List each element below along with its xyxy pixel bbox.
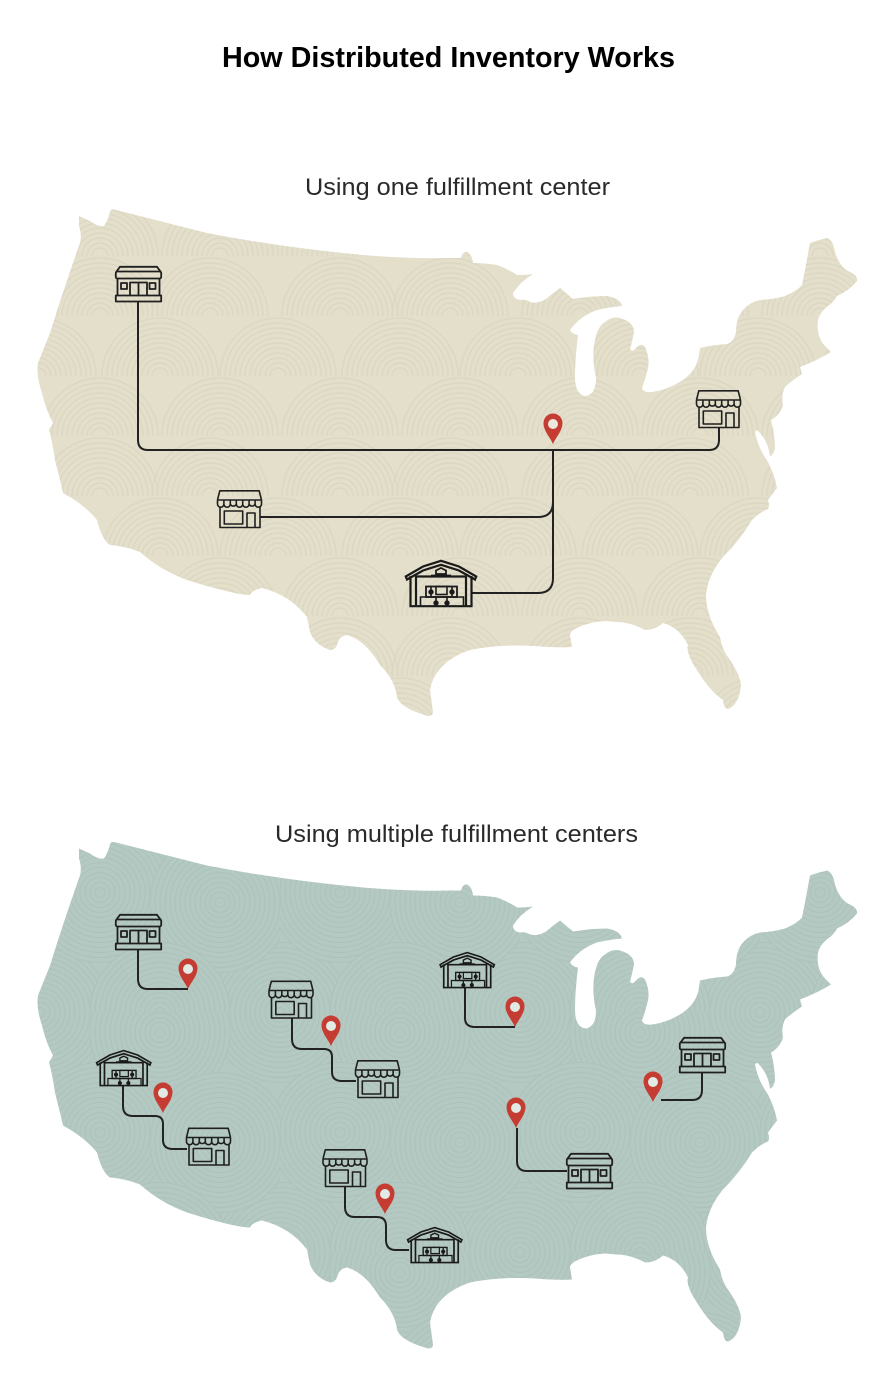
icon: store 1	[116, 915, 161, 950]
icon: location pin 1	[178, 958, 198, 989]
icon: warehouse 2	[97, 1051, 151, 1086]
icon: store 3	[567, 1154, 612, 1188]
icon: warehouse 1	[440, 953, 494, 988]
icon: location pin 3	[506, 996, 524, 1027]
panel: multiple fulfillment centers map	[38, 842, 857, 1348]
icon: location pin 6	[506, 1098, 526, 1128]
title: How Distributed Inventory Works	[222, 42, 675, 74]
heading: multiple fulfillment centers: Using multiple fulfillment centers	[275, 821, 638, 848]
connector lines	[123, 950, 702, 1250]
icon: store 6	[186, 1128, 230, 1165]
icon: warehouse 3	[408, 1228, 462, 1263]
icon: location pin 4	[154, 1082, 172, 1113]
icon: store 4	[269, 981, 313, 1018]
connector lines	[138, 301, 719, 593]
heading: one fulfillment center: Using one fulfillment center	[305, 174, 610, 201]
icon: store, east	[696, 391, 740, 428]
icon: location pin	[544, 414, 562, 444]
map: United States, teal	[38, 842, 857, 1348]
icon: location pin 2	[322, 1016, 340, 1046]
icon: store, southwest	[218, 491, 262, 528]
icon: location pin 7	[376, 1184, 394, 1214]
panel: one fulfillment center map	[38, 209, 857, 716]
icon: warehouse	[406, 561, 476, 606]
icon: store 5	[356, 1061, 400, 1098]
icon: store 2	[680, 1038, 725, 1072]
map: United States, tan	[38, 209, 857, 716]
icon: location pin 5	[644, 1072, 662, 1102]
icon: store, northwest	[116, 267, 161, 302]
icon: store 7	[323, 1150, 367, 1186]
